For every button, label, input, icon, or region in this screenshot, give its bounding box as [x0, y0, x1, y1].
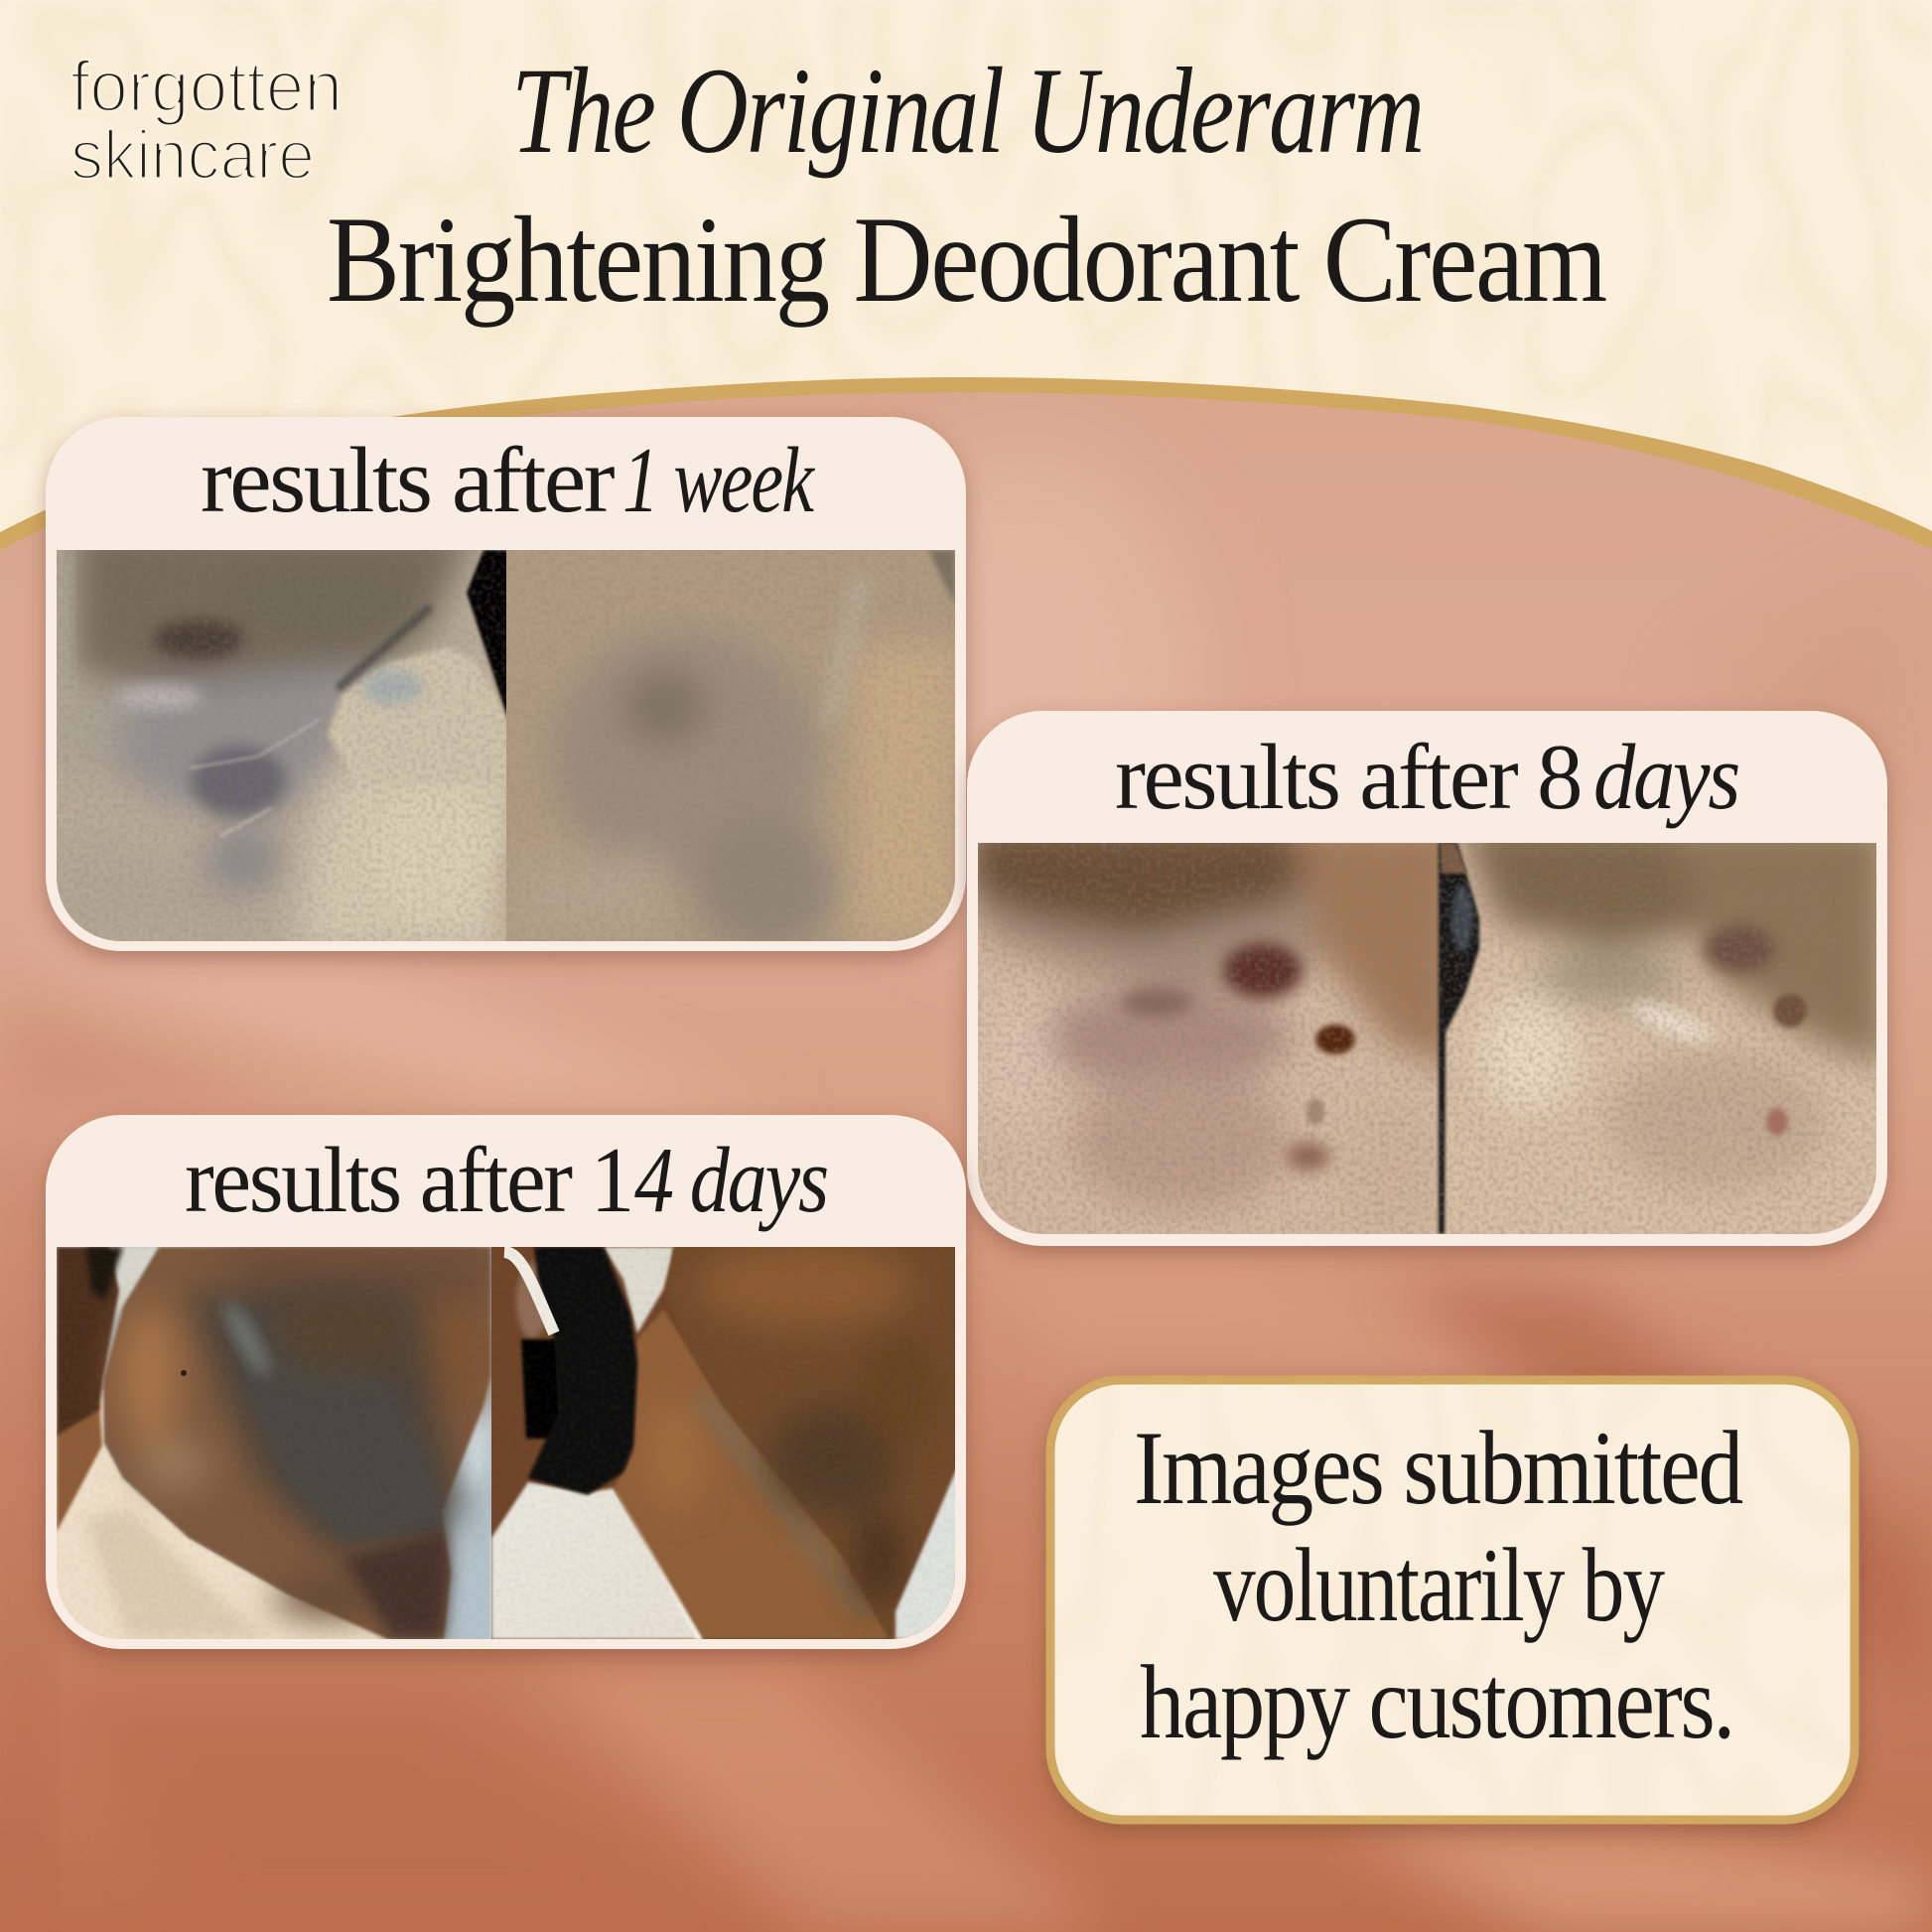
- title: The Original Underarm: [511, 43, 1423, 179]
- callout text: happy customers.: [1140, 1644, 1733, 1760]
- background: cream marble header: [0, 0, 1932, 695]
- heading: 8 days: days: [1593, 726, 1738, 829]
- title: [327, 43, 1606, 328]
- photo: 1 week before and after: [57, 550, 955, 941]
- panel: results after 1 week: [45, 417, 966, 953]
- callout text: [1134, 1410, 1742, 1760]
- photo: 14 days before and after: [57, 1241, 958, 1639]
- gold curved band: [0, 377, 1932, 695]
- callout text: voluntarily by: [1213, 1527, 1665, 1643]
- panel: results after 14 days: [46, 1115, 966, 1649]
- panel: results after 8 days: [967, 711, 1887, 1246]
- logo: forgotten skincare: skincare: [70, 116, 315, 194]
- heading: 14 days: 4 days: [634, 1129, 827, 1232]
- heading: 14 days: results after 1: [185, 1129, 632, 1232]
- callout text: Images submitted: [1134, 1410, 1742, 1526]
- title: Brightening Deodorant Cream: [327, 192, 1606, 328]
- heading: 1 week: [201, 429, 816, 532]
- callout: images submitted note: [1050, 1380, 1855, 1820]
- photo: 8 days before and after: [968, 824, 1886, 1241]
- logo: forgotten skincare: forgotten: [70, 48, 343, 127]
- heading: 1 week: 1 week: [622, 429, 816, 532]
- logo: forgotten skincare: [70, 48, 343, 194]
- heading: 8 days: results after 8: [1115, 726, 1581, 829]
- heading: 1 week: results after: [201, 429, 615, 532]
